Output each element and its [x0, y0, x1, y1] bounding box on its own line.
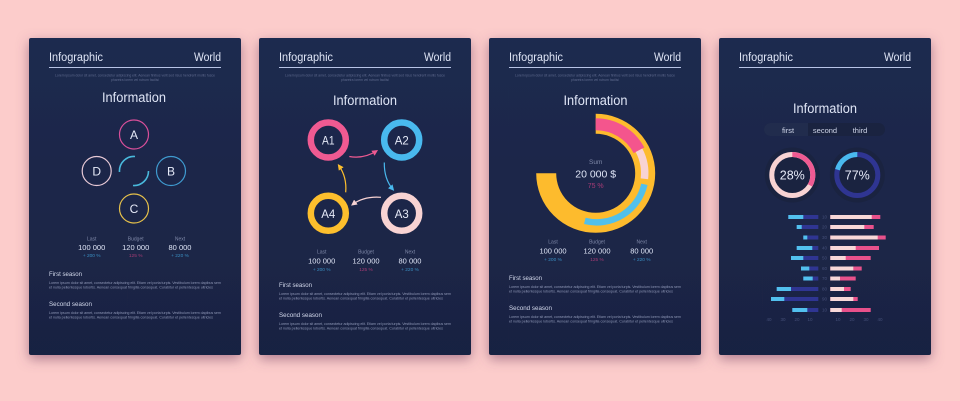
chart centre: sum: Sum — [589, 159, 602, 166]
tabs: first — [782, 126, 795, 135]
text block: card 1 first season — [49, 271, 221, 290]
text block: card 1 second season: Second season — [49, 301, 92, 308]
text block: card 1 first season: Lorem ipsum dolor sit amet, consectetur adipiscing elit. Etiam vel porta turpis. Vestibulum lorem dapibus sem — [49, 281, 221, 285]
text block: card 2 second season: et nulla pellentesque lobortis. Aenean consequat fringilla consequat. Curabitur et pellentesque ultricies — [279, 326, 443, 330]
chart: row labels: 60 — [822, 266, 827, 271]
stats: card 1 — [78, 237, 191, 259]
stats: card 3 — [539, 240, 653, 263]
header: card 2: Lorem ipsum dolor sit amet, consectetur adipiscing elit. Aenean finibus velit sed risus hendrerit mollis fusce — [285, 74, 445, 78]
chart: axis labels: 10 — [835, 317, 841, 322]
heading: card 3 information: Information — [564, 93, 628, 108]
stats: card 2: Last — [317, 250, 327, 256]
text block: card 2 first season: Lorem ipsum dolor sit amet, consectetur adipiscing elit. Etiam vel porta turpis. Vestibulum lorem dapibus sem — [279, 292, 451, 296]
text block: card 1 second season: Lorem ipsum dolor sit amet, consectetur adipiscing elit. Etiam vel porta turpis. Vestibulum lorem dapibus sem — [49, 311, 221, 315]
panel: card 4 dashboard — [719, 38, 931, 355]
header: card 4: Infographic — [739, 52, 793, 64]
stats: card 3: + 200 % — [544, 257, 563, 263]
text block: card 3 first season: First season — [509, 275, 542, 282]
stats: card 2: 120 000 — [352, 256, 380, 266]
chart: radial ring — [546, 124, 645, 223]
header: card 2: World — [424, 52, 451, 64]
chart: row labels: 70 — [822, 276, 827, 281]
diagram: four outlined circles: D — [92, 164, 101, 178]
stats: card 1: Last — [87, 237, 97, 243]
diagram: four-step cycle: A2 — [395, 134, 409, 148]
header: card 1: pharetra lorem vel rutrum facilisi — [111, 78, 159, 82]
diagram: four-step cycle — [311, 122, 419, 231]
arrow: A1 to A2 — [349, 151, 376, 157]
panel: card 2 cycle — [259, 38, 471, 355]
heading: card 1 information: Information — [102, 90, 166, 105]
chart: row labels: 20 — [822, 225, 827, 230]
stats: card 2: 80 000 — [399, 256, 421, 266]
text block: card 3 first season: et nulla pellentesque lobortis. Aenean consequat fringilla consequat. Curabitur et pellentesque ultricies — [509, 290, 673, 294]
arrow: A4 to A1 — [339, 166, 346, 192]
header: card 3: pharetra lorem vel rutrum facilisi — [571, 78, 619, 82]
diagram: four-step cycle: A4 — [321, 207, 336, 221]
tabs: second — [813, 126, 837, 135]
stats: card 1: + 220 % — [171, 253, 190, 259]
chart: axis labels — [766, 317, 883, 322]
header: card 3: Infographic — [509, 52, 563, 64]
header: card 1 — [49, 52, 221, 82]
chart: axis labels: 40 — [877, 317, 883, 322]
panel: card 3 radial chart — [489, 38, 701, 355]
stats: card 2: 100 000 — [308, 256, 335, 266]
chart: row labels: 30 — [822, 235, 827, 240]
chart centre: sum — [575, 159, 616, 190]
chart: axis labels: 10 — [807, 317, 813, 322]
chart: diverging bars right — [830, 215, 886, 312]
diagram: four outlined circles: B — [167, 164, 175, 178]
text block: card 1 first season: First season — [49, 271, 82, 278]
header: card 1: Infographic — [49, 52, 103, 64]
header: card 1: Lorem ipsum dolor sit amet, consectetur adipiscing elit. Aenean finibus velit sed risus hendrerit mollis fusce — [55, 74, 215, 78]
chart: axis labels: 30 — [780, 317, 786, 322]
tabs — [764, 123, 885, 136]
diagram: four-step cycle: A1 — [322, 134, 335, 148]
arrow: A3 to A4 — [352, 197, 381, 204]
stats: card 2: 125 % — [359, 267, 374, 273]
stats: card 3: + 220 % — [633, 257, 651, 263]
chart centre: sum: 75 % — [588, 183, 604, 190]
chart: axis labels: 20 — [849, 317, 855, 322]
chart: row labels — [822, 215, 827, 313]
heading: card 2 information: Information — [333, 93, 397, 108]
header: card 2: Infographic — [279, 52, 333, 64]
panel: card 1 circles — [29, 38, 241, 355]
stats: card 1: 100 000 — [78, 243, 105, 252]
stats: card 2 — [308, 250, 421, 273]
stats: card 2: Next — [405, 250, 416, 256]
stats: card 2: + 200 % — [313, 267, 331, 273]
text block: card 2 second season: Second season — [279, 312, 322, 319]
stats: card 1: + 200 % — [83, 253, 101, 259]
text block: card 2 second season: Lorem ipsum dolor sit amet, consectetur adipiscing elit. Etiam vel porta turpis. Vestibulum lorem dapibus sem — [279, 322, 451, 326]
stats: card 3: 100 000 — [539, 246, 567, 256]
text block: card 2 first season — [279, 282, 451, 300]
text block: card 3 second season: Lorem ipsum dolor sit amet, consectetur adipiscing elit. Etiam vel porta turpis. Vestibulum lorem dapibus sem — [509, 315, 681, 319]
header: card 4 — [739, 52, 911, 68]
diagram: four outlined circles — [82, 120, 186, 223]
diagram: four outlined circles: C — [130, 202, 139, 216]
text block: card 1 second season — [49, 301, 221, 320]
donut: 77%: 77% — [845, 168, 870, 182]
header: card 2: pharetra lorem vel rutrum facilisi — [341, 78, 389, 82]
chart: row labels: 40 — [822, 246, 827, 251]
chart: row labels: 10 — [822, 308, 827, 313]
chart: axis labels: 40 — [766, 317, 772, 322]
header: card 3 — [509, 52, 681, 82]
stats: card 1: Budget — [128, 237, 144, 243]
chart: row labels: 80 — [822, 287, 827, 292]
text block: card 2 first season: First season — [279, 282, 312, 289]
stats: card 1: 125 % — [129, 253, 143, 259]
diagram: four-step cycle: A3 — [395, 207, 409, 221]
header: card 4: World — [884, 52, 911, 64]
chart: row labels: 90 — [822, 297, 827, 302]
diagram: four outlined circles: A — [130, 128, 138, 142]
text block: card 3 first season: Lorem ipsum dolor sit amet, consectetur adipiscing elit. Etiam vel porta turpis. Vestibulum lorem dapibus sem — [509, 285, 681, 289]
arrow: A2 to A3 — [384, 162, 393, 190]
text block: card 2 first season: et nulla pellentesque lobortis. Aenean consequat fringilla consequat. Curabitur et pellentesque ultricies — [279, 296, 443, 300]
stats: card 3: 120 000 — [583, 246, 611, 256]
text block: card 3 first season — [509, 275, 681, 294]
donut: 77% — [830, 148, 885, 202]
text block: card 1 second season: et nulla pellentesque lobortis. Aenean consequat fringilla consequat. Curabitur et pellentesque ultricies — [49, 316, 213, 320]
stats: card 1: 120 000 — [122, 243, 149, 252]
chart: diverging bars left — [771, 215, 818, 312]
heading: card 4 information: Information — [793, 101, 857, 116]
chart: axis labels: 30 — [863, 317, 869, 322]
stats: card 1: 80 000 — [169, 243, 191, 252]
stats: card 3: 80 000 — [630, 246, 653, 256]
header: card 1: World — [194, 52, 221, 64]
text block: card 3 second season: et nulla pellentesque lobortis. Aenean consequat fringilla consequat. Curabitur et pellentesque ultricies — [509, 320, 673, 324]
stats: card 2: Budget — [358, 250, 375, 256]
donut: 28%: 28% — [780, 168, 805, 182]
text block: card 3 second season: Second season — [509, 305, 552, 312]
chart: row labels: 50 — [822, 256, 827, 261]
donut: 28% — [765, 148, 820, 202]
text block: card 1 first season: et nulla pellentesque lobortis. Aenean consequat fringilla consequat. Curabitur et pellentesque ultricies — [49, 286, 213, 290]
stats: card 3: Last — [548, 240, 558, 246]
text block: card 2 second season — [279, 312, 451, 330]
stats: card 1: Next — [175, 237, 186, 243]
header: card 3: World — [654, 52, 681, 64]
text block: card 3 second season — [509, 305, 681, 324]
chart centre: sum: 20 000 $ — [575, 168, 616, 180]
header: card 2 — [279, 52, 451, 82]
stats: card 3: Budget — [589, 240, 606, 246]
stats: card 3: 125 % — [590, 257, 605, 263]
tabs: third — [853, 126, 867, 135]
header: card 3: Lorem ipsum dolor sit amet, consectetur adipiscing elit. Aenean finibus velit sed risus hendrerit mollis fusce — [515, 74, 675, 78]
chart: row labels: 10 — [822, 215, 827, 220]
stats: card 3: Next — [637, 240, 647, 246]
stats: card 2: + 220 % — [401, 267, 420, 273]
chart: axis labels: 20 — [794, 317, 800, 322]
